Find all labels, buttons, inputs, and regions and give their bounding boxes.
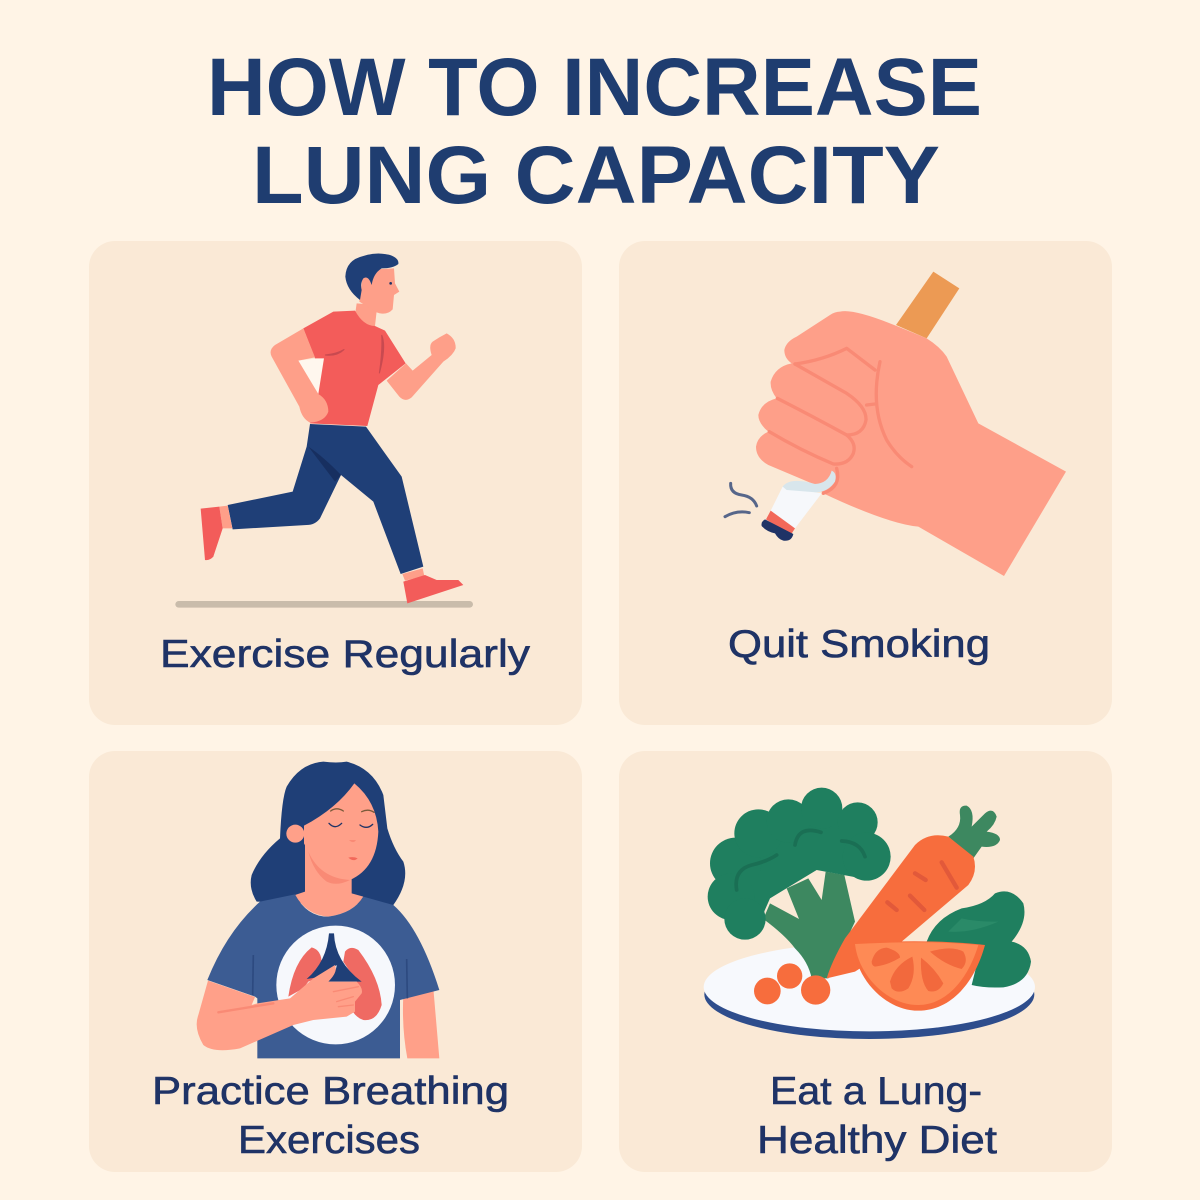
label: practice breathing exercises <box>152 1070 509 1162</box>
title: HOW TO INCREASE <box>207 42 982 133</box>
label: practice breathing exercises: Practice Breathing <box>152 1070 509 1113</box>
icon: plate of vegetables <box>704 788 1035 1039</box>
panel: quit smoking <box>619 241 1112 725</box>
label: eat a lung-healthy diet: Healthy Diet <box>757 1119 997 1162</box>
panel: practice breathing exercises <box>89 751 582 1172</box>
panel: exercise regularly <box>89 241 582 725</box>
title <box>207 42 982 221</box>
title: LUNG CAPACITY <box>252 130 940 221</box>
icon: running man <box>175 254 473 608</box>
panel: eat a lung-healthy diet <box>619 751 1112 1172</box>
label: exercise regularly: Exercise Regularly <box>160 633 531 676</box>
icon: woman with lungs <box>197 762 439 1058</box>
label: eat a lung-healthy diet: Eat a Lung- <box>770 1070 982 1113</box>
label: eat a lung-healthy diet <box>757 1070 997 1162</box>
label: practice breathing exercises: Exercises <box>238 1119 420 1162</box>
label: quit smoking: Quit Smoking <box>728 623 990 666</box>
icon: hand crushing cigarette <box>725 272 1066 576</box>
